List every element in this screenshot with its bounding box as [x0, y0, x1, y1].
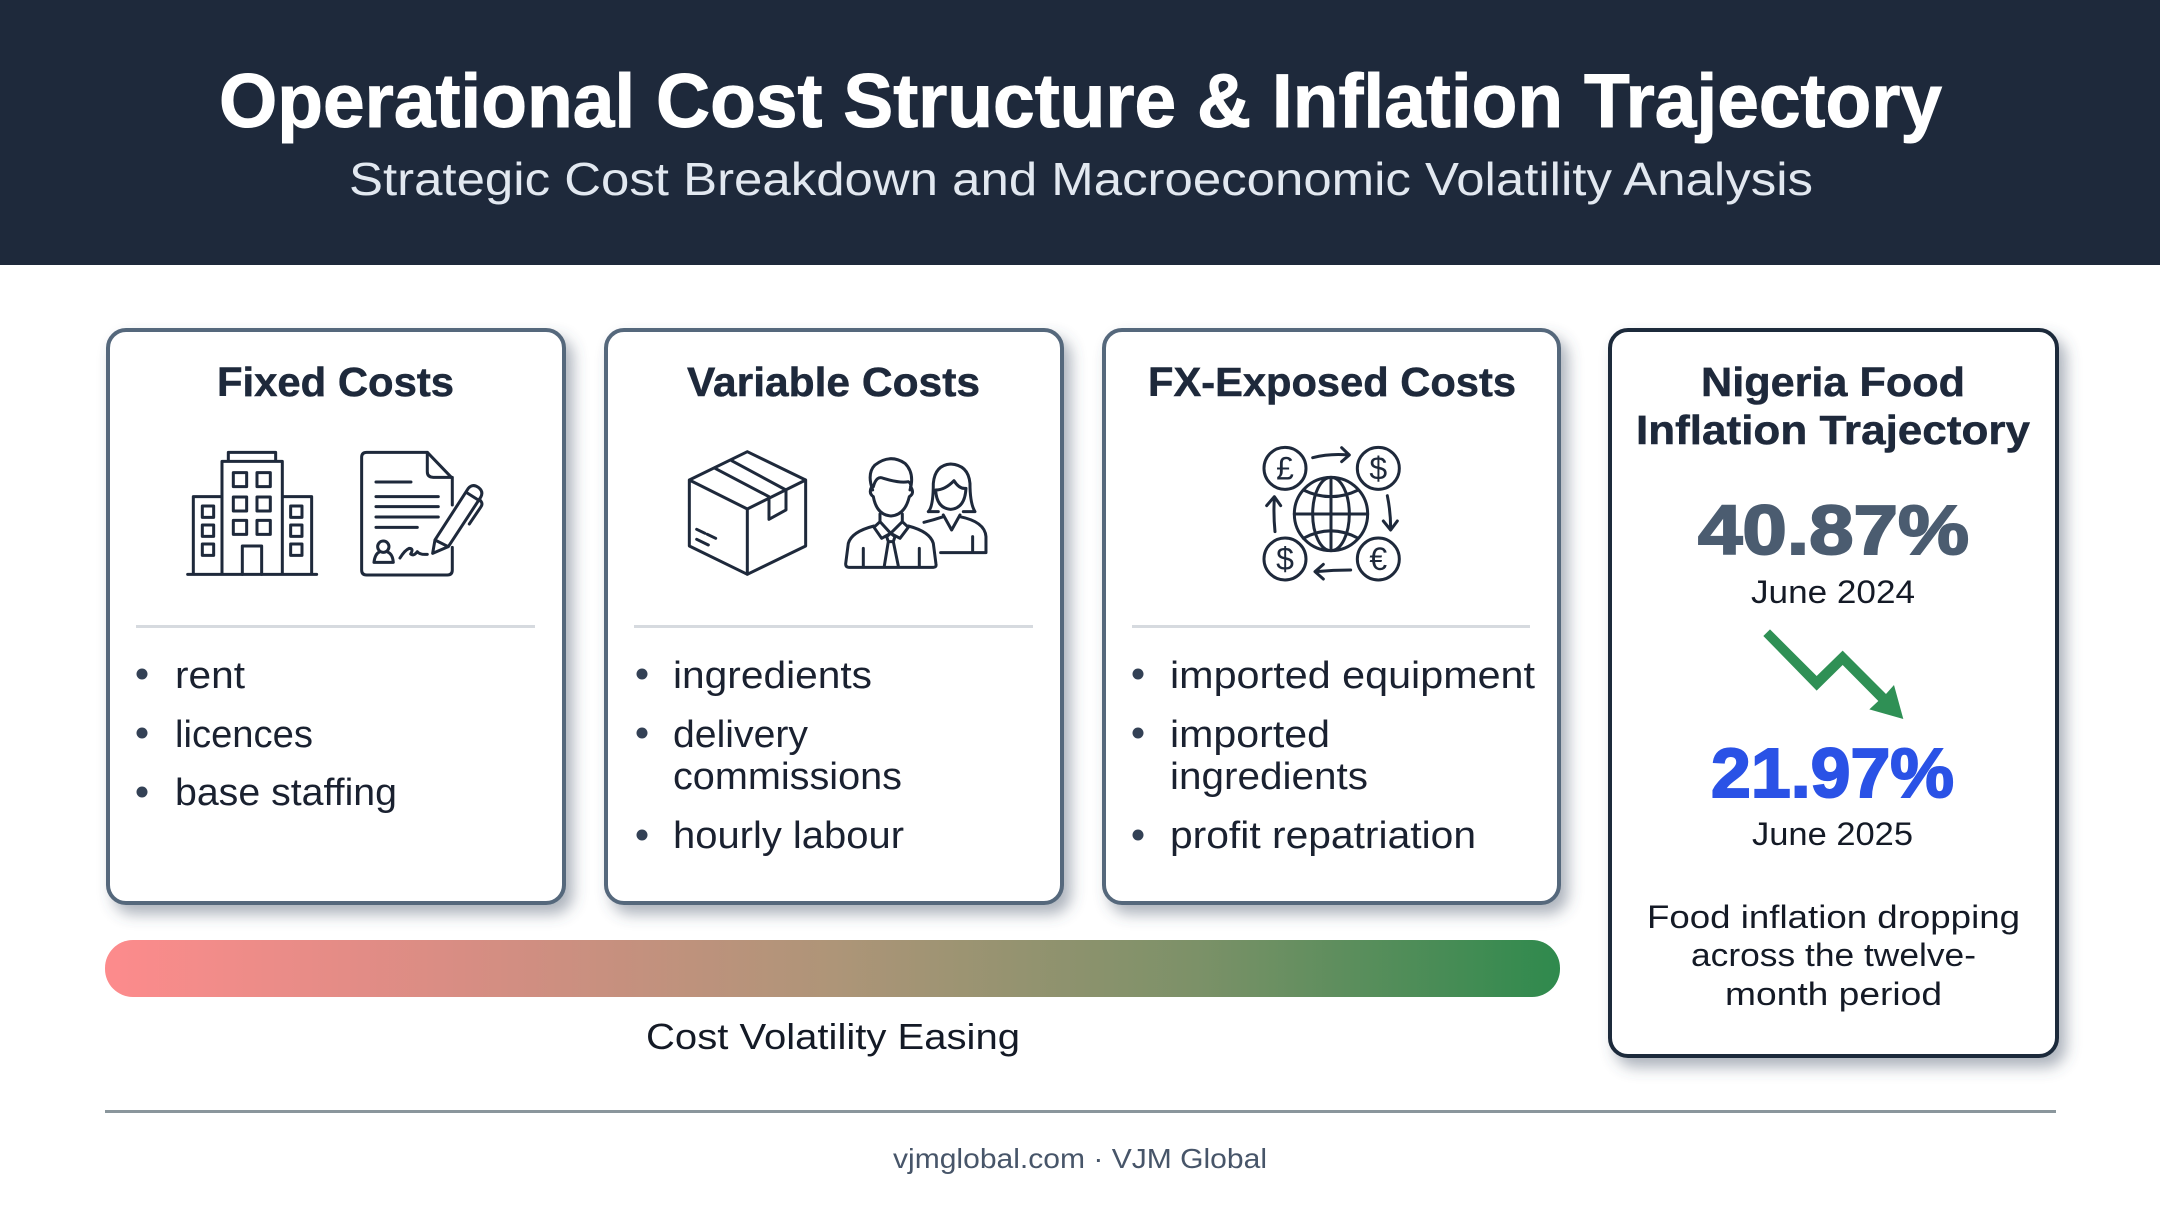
icon: downward trend arrow	[1763, 629, 1903, 719]
icon: global currency exchange: €	[1369, 541, 1387, 577]
panel: nigeria food inflation	[1610, 330, 2057, 1056]
footer: vjmglobal.com · VJM Global	[893, 1143, 1267, 1174]
title: Operational Cost Structure & Inflation Trajectory	[219, 59, 1942, 144]
divider	[136, 625, 535, 628]
icon: global currency exchange	[1264, 447, 1399, 580]
icon: signed contract	[362, 452, 482, 575]
bullet list	[136, 655, 397, 814]
stat: june 2025	[1711, 734, 1954, 852]
bullet list: base staffing	[175, 772, 397, 814]
icon: global currency exchange: £	[1276, 450, 1294, 486]
icon: cardboard box	[689, 452, 806, 574]
divider	[1132, 625, 1530, 628]
panel: fixed costs	[108, 330, 564, 903]
icon: global currency exchange: $	[1369, 450, 1387, 486]
bullet list: delivery	[673, 714, 808, 756]
bullet list: licences	[175, 714, 313, 756]
stat: june 2025: 21.97%	[1711, 734, 1954, 812]
heading: variable costs: Variable Costs	[687, 359, 980, 405]
heading: fixed costs: Fixed Costs	[217, 359, 454, 405]
panel: fx-exposed costs	[1104, 330, 1559, 903]
bullet list: imported	[1170, 714, 1330, 756]
panel: variable costs	[606, 330, 1062, 903]
stat: june 2025: June 2025	[1752, 816, 1913, 852]
heading: fx-exposed costs: FX-Exposed Costs	[1148, 359, 1516, 405]
heading: nigeria food inflation trajectory	[1636, 359, 2030, 453]
heading: nigeria food inflation trajectory: Inflation Trajectory	[1636, 407, 2030, 453]
bullet list: rent	[175, 655, 245, 697]
note: inflation text: Food inflation dropping	[1647, 899, 2020, 935]
bullet list	[636, 655, 904, 857]
header banner	[0, 0, 2160, 265]
bullet list: ingredients	[1170, 756, 1368, 798]
icon: global currency exchange: $	[1276, 541, 1294, 577]
bullet list: ingredients	[673, 655, 872, 697]
icon: staff people	[846, 459, 986, 567]
note: inflation text: month period	[1725, 976, 1942, 1012]
stat: june 2024: 40.87%	[1698, 491, 1969, 569]
stat: june 2024: June 2024	[1751, 574, 1915, 610]
label: cost volatility easing: Cost Volatility Easing	[646, 1016, 1020, 1057]
heading: nigeria food inflation trajectory: Nigeria Food	[1701, 359, 1965, 405]
gradient bar: cost volatility	[105, 940, 1560, 997]
bullet list: hourly labour	[673, 815, 904, 857]
bullet list: commissions	[673, 756, 902, 798]
note: inflation text	[1647, 899, 2020, 1012]
note: inflation text: across the twelve-	[1691, 937, 1976, 973]
bullet list: imported equipment	[1170, 655, 1535, 697]
subtitle: Strategic Cost Breakdown and Macroeconomic Volatility Analysis	[349, 153, 1813, 205]
divider	[634, 625, 1033, 628]
bullet list: profit repatriation	[1170, 815, 1476, 857]
stat: june 2024	[1698, 491, 1969, 610]
icon: office building	[188, 452, 317, 574]
bullet list	[1132, 655, 1535, 857]
